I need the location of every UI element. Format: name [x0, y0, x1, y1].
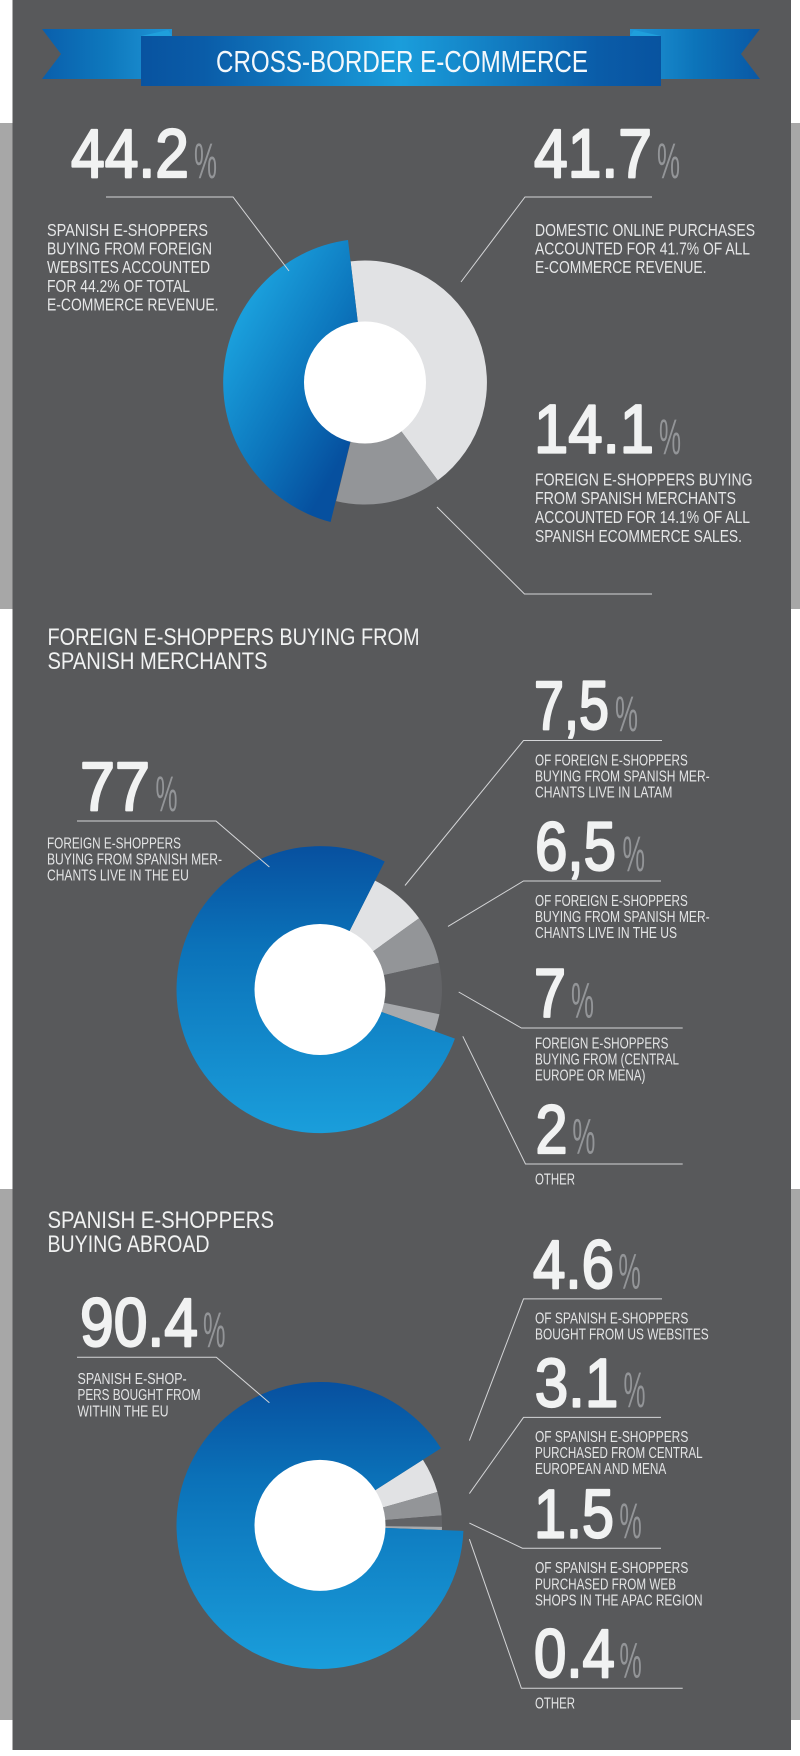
description: FOREIGN E-SHOPPERS [47, 835, 181, 852]
description: BOUGHT FROM US WEBSITES [535, 1327, 709, 1344]
description: OTHER [535, 1696, 575, 1712]
leader line [437, 507, 652, 594]
percent sign: % [619, 1632, 642, 1688]
description [535, 1311, 709, 1344]
description [535, 893, 710, 942]
number: 6,5: 6,5 [535, 808, 616, 885]
number: 44.2: 44.2 [71, 115, 189, 192]
callout: 7% [459, 954, 683, 1084]
description: WEBSITES ACCOUNTED [47, 257, 210, 277]
leader line [469, 1539, 683, 1688]
description [535, 1036, 679, 1084]
heading: spanish e-shoppers [48, 1207, 274, 1258]
leader line [459, 992, 683, 1028]
number: 0.4: 0.4 [534, 1615, 615, 1692]
description: BUYING FROM FOREIGN [47, 238, 212, 258]
callout: 4.6% [469, 1226, 709, 1441]
percent sign: % [203, 1302, 226, 1358]
description: OF SPANISH E-SHOPPERS [535, 1560, 688, 1577]
description: E-COMMERCE REVENUE. [535, 257, 706, 277]
number: 4.6: 4.6 [533, 1226, 614, 1303]
callout: 14.1% [437, 390, 752, 594]
heading: foreign e-shoppers: FOREIGN E-SHOPPERS BUYING FROM [48, 624, 420, 651]
description [535, 1560, 703, 1609]
description: PURCHASED FROM CENTRAL [535, 1445, 703, 1462]
percent sign: % [622, 826, 645, 882]
description: EUROPEAN AND MENA [535, 1461, 667, 1478]
percent sign: % [571, 972, 594, 1028]
description: FOR 44.2% OF TOTAL [47, 276, 190, 296]
number: 14.1: 14.1 [534, 390, 654, 468]
percent sign: % [618, 1244, 641, 1300]
donut chart 3 [177, 1382, 463, 1669]
description [535, 220, 755, 277]
number: 2: 2 [536, 1091, 568, 1168]
callout: 7,5% [405, 667, 710, 886]
number: 1.5: 1.5 [534, 1476, 614, 1552]
description: SHOPS IN THE APAC REGION [535, 1592, 703, 1609]
description [535, 1429, 703, 1478]
number: 7: 7 [534, 954, 566, 1032]
percent sign: % [619, 1493, 642, 1549]
callout: 3.1%: % [624, 1362, 646, 1418]
callout: 44.2% [47, 115, 289, 314]
leader line [106, 197, 289, 271]
description: WITHIN THE EU [78, 1403, 168, 1420]
callout: 14.1%: % [659, 409, 681, 465]
number: 7,5: 7,5 [534, 667, 609, 744]
description: OF FOREIGN E-SHOPPERS [535, 752, 688, 769]
description: PURCHASED FROM WEB [535, 1576, 676, 1593]
description: EUROPE OR MENA) [535, 1067, 645, 1084]
description: ACCOUNTED FOR 14.1% OF ALL [535, 507, 750, 527]
description: OTHER [535, 1172, 575, 1188]
leader line [469, 1299, 662, 1441]
title: CROSS-BORDER E-COMMERCE [216, 45, 588, 79]
leader line [469, 1417, 661, 1494]
leader line [461, 197, 652, 282]
number: 90.4: 90.4 [80, 1284, 198, 1361]
callout: 77% [47, 748, 269, 884]
title ribbon [42, 29, 760, 86]
description: CHANTS LIVE IN THE EU [47, 868, 189, 884]
leader line [448, 881, 661, 926]
description: FOREIGN E-SHOPPERS [535, 1036, 668, 1052]
heading: foreign e-shoppers: SPANISH MERCHANTS [48, 648, 268, 675]
callout: 6,5% [448, 808, 710, 942]
description [47, 220, 218, 314]
description [47, 835, 222, 884]
description: BUYING FROM SPANISH MER- [47, 851, 222, 868]
description: E-COMMERCE REVENUE. [47, 294, 218, 314]
leader line [469, 1523, 661, 1548]
description: CHANTS LIVE IN THE US [535, 925, 677, 942]
percent sign: % [572, 1108, 595, 1164]
callout: 0.4% [469, 1539, 683, 1712]
leader line [77, 821, 269, 867]
heading: spanish e-shoppers: BUYING ABROAD [48, 1231, 210, 1258]
description: OF FOREIGN E-SHOPPERS [535, 893, 688, 910]
percent sign: % [657, 133, 680, 189]
callout: 90.4% [77, 1284, 269, 1420]
description: BUYING FROM SPANISH MER- [535, 768, 710, 785]
donut chart 1 [223, 240, 487, 522]
description: BUYING FROM SPANISH MER- [535, 909, 710, 926]
callout: 3.1% [469, 1344, 703, 1494]
number: 41.7: 41.7 [534, 115, 652, 192]
description: SPANISH ECOMMERCE SALES. [535, 526, 742, 546]
description [535, 470, 752, 546]
heading: foreign e-shoppers [48, 624, 420, 675]
number: 3.1: 3.1 [535, 1344, 618, 1421]
callout: 1.5% [469, 1476, 703, 1609]
percent sign: % [615, 686, 638, 742]
description: OF SPANISH E-SHOPPERS [535, 1429, 688, 1446]
description: OF SPANISH E-SHOPPERS [535, 1311, 688, 1328]
description: SPANISH E-SHOPPERS [47, 220, 208, 240]
description: CHANTS LIVE IN LATAM [535, 784, 672, 802]
description [535, 752, 710, 802]
heading: spanish e-shoppers: SPANISH E-SHOPPERS [48, 1207, 274, 1234]
number: 77: 77 [80, 748, 150, 825]
leader line [77, 1357, 269, 1403]
callout: 2% [463, 1036, 683, 1188]
callout: 41.7% [461, 115, 755, 282]
leader line [463, 1036, 683, 1164]
description: ACCOUNTED FOR 41.7% OF ALL [535, 238, 750, 258]
description: FOREIGN E-SHOPPERS BUYING [535, 470, 752, 490]
percent sign: % [194, 133, 217, 189]
description: BUYING FROM (CENTRAL [535, 1052, 679, 1069]
description [78, 1371, 200, 1420]
leader line [405, 740, 662, 886]
description: PERS BOUGHT FROM [78, 1387, 200, 1404]
donut chart 2 [177, 846, 455, 1133]
description: FROM SPANISH MERCHANTS [535, 488, 736, 508]
description: SPANISH E-SHOP- [78, 1371, 187, 1388]
callout: 77%: % [156, 766, 178, 822]
